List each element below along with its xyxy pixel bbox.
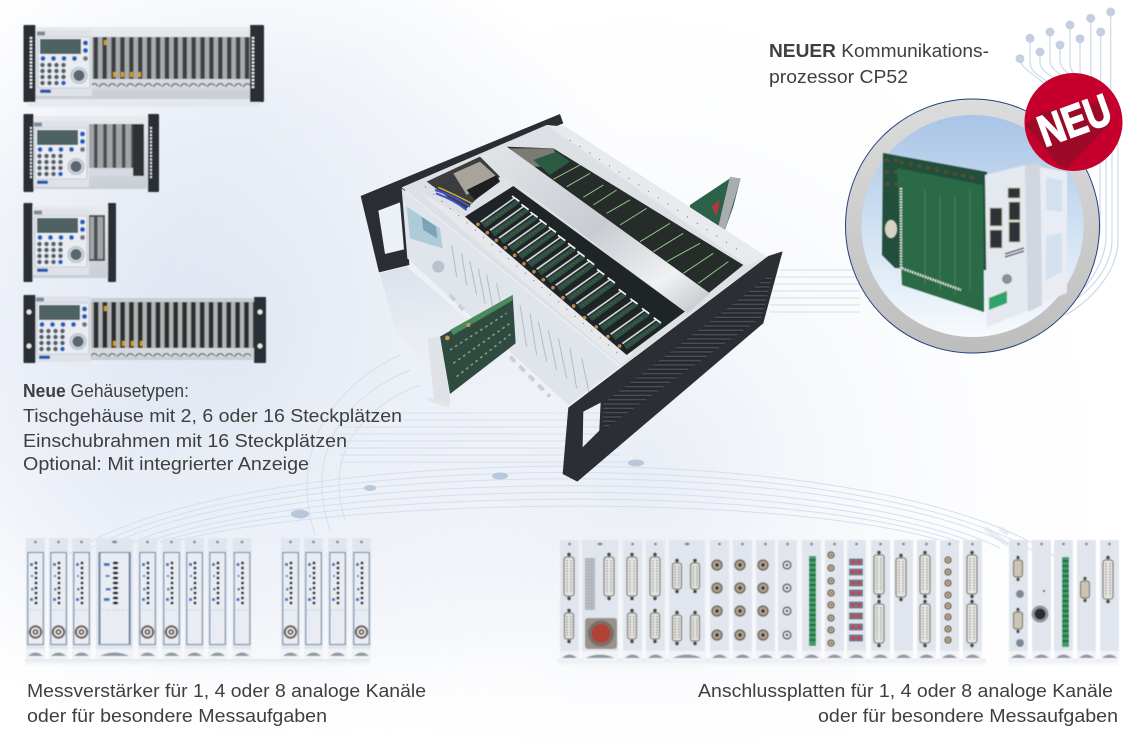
circuit traces icon	[1016, 8, 1118, 315]
rack: 16 slots insert frame	[24, 295, 266, 363]
front rail holes	[425, 187, 620, 355]
caption: connection plates: oder für besondere Messaufgaben	[818, 706, 1118, 726]
CP52 round panel	[846, 99, 1100, 353]
small card behind chassis	[690, 177, 741, 230]
top silver frame	[402, 125, 767, 367]
NEU badge	[1024, 73, 1122, 171]
front handle frame with cooling fins	[563, 251, 783, 482]
pulled-out card	[427, 295, 516, 407]
center cover strip	[480, 147, 710, 313]
right side rail	[547, 125, 767, 265]
wide amplifier module	[96, 538, 133, 659]
text: housing types: Neue Gehäusetypen:	[23, 381, 189, 401]
slot bay with inserted cards	[465, 186, 685, 355]
caption: amplifiers: oder für besondere Messaufgaben	[27, 706, 327, 726]
text: housing types: Tischgehäuse mit 2, 6 oder 16 Steckplätzen	[23, 406, 402, 426]
rear bay with boards	[507, 147, 743, 293]
amplifier modules	[25, 538, 371, 669]
rack: 6 slots tabletop	[24, 114, 159, 192]
caption: amplifiers: Messverstärker für 1, 4 oder 8 analoge Kanäle	[27, 681, 426, 701]
front rail	[417, 190, 633, 365]
rear handle frame	[361, 114, 563, 272]
rack: 2 slots tabletop	[24, 203, 116, 282]
wide plate with circular connector	[582, 540, 618, 661]
text: housing types	[23, 381, 402, 474]
NEU badge: NEU	[1032, 85, 1118, 157]
power supply bay	[427, 157, 507, 213]
text: new communication processor: NEUER Kommunikations-	[769, 41, 989, 61]
right rail holes	[570, 140, 743, 253]
connection plates main group	[558, 540, 986, 669]
text: new communication processor	[769, 41, 989, 87]
caption: connection plates	[698, 681, 1118, 726]
text: new communication processor: prozessor CP52	[769, 67, 908, 87]
chassis reflection	[380, 267, 567, 460]
connection plates special group	[1008, 540, 1119, 669]
text: housing types: Optional: Mit integrierter Anzeige	[23, 454, 309, 474]
left face with module fronts	[402, 188, 620, 405]
caption: amplifiers	[27, 681, 426, 726]
caption: connection plates: Anschlussplatten für 1, 4 oder 8 analoge Kanäle	[698, 681, 1113, 701]
rack: 16 slots tabletop	[24, 25, 264, 107]
CP52 card	[882, 153, 1067, 327]
central open chassis	[361, 114, 783, 482]
text: housing types: Einschubrahmen mit 16 Steckplätzen	[23, 431, 347, 451]
